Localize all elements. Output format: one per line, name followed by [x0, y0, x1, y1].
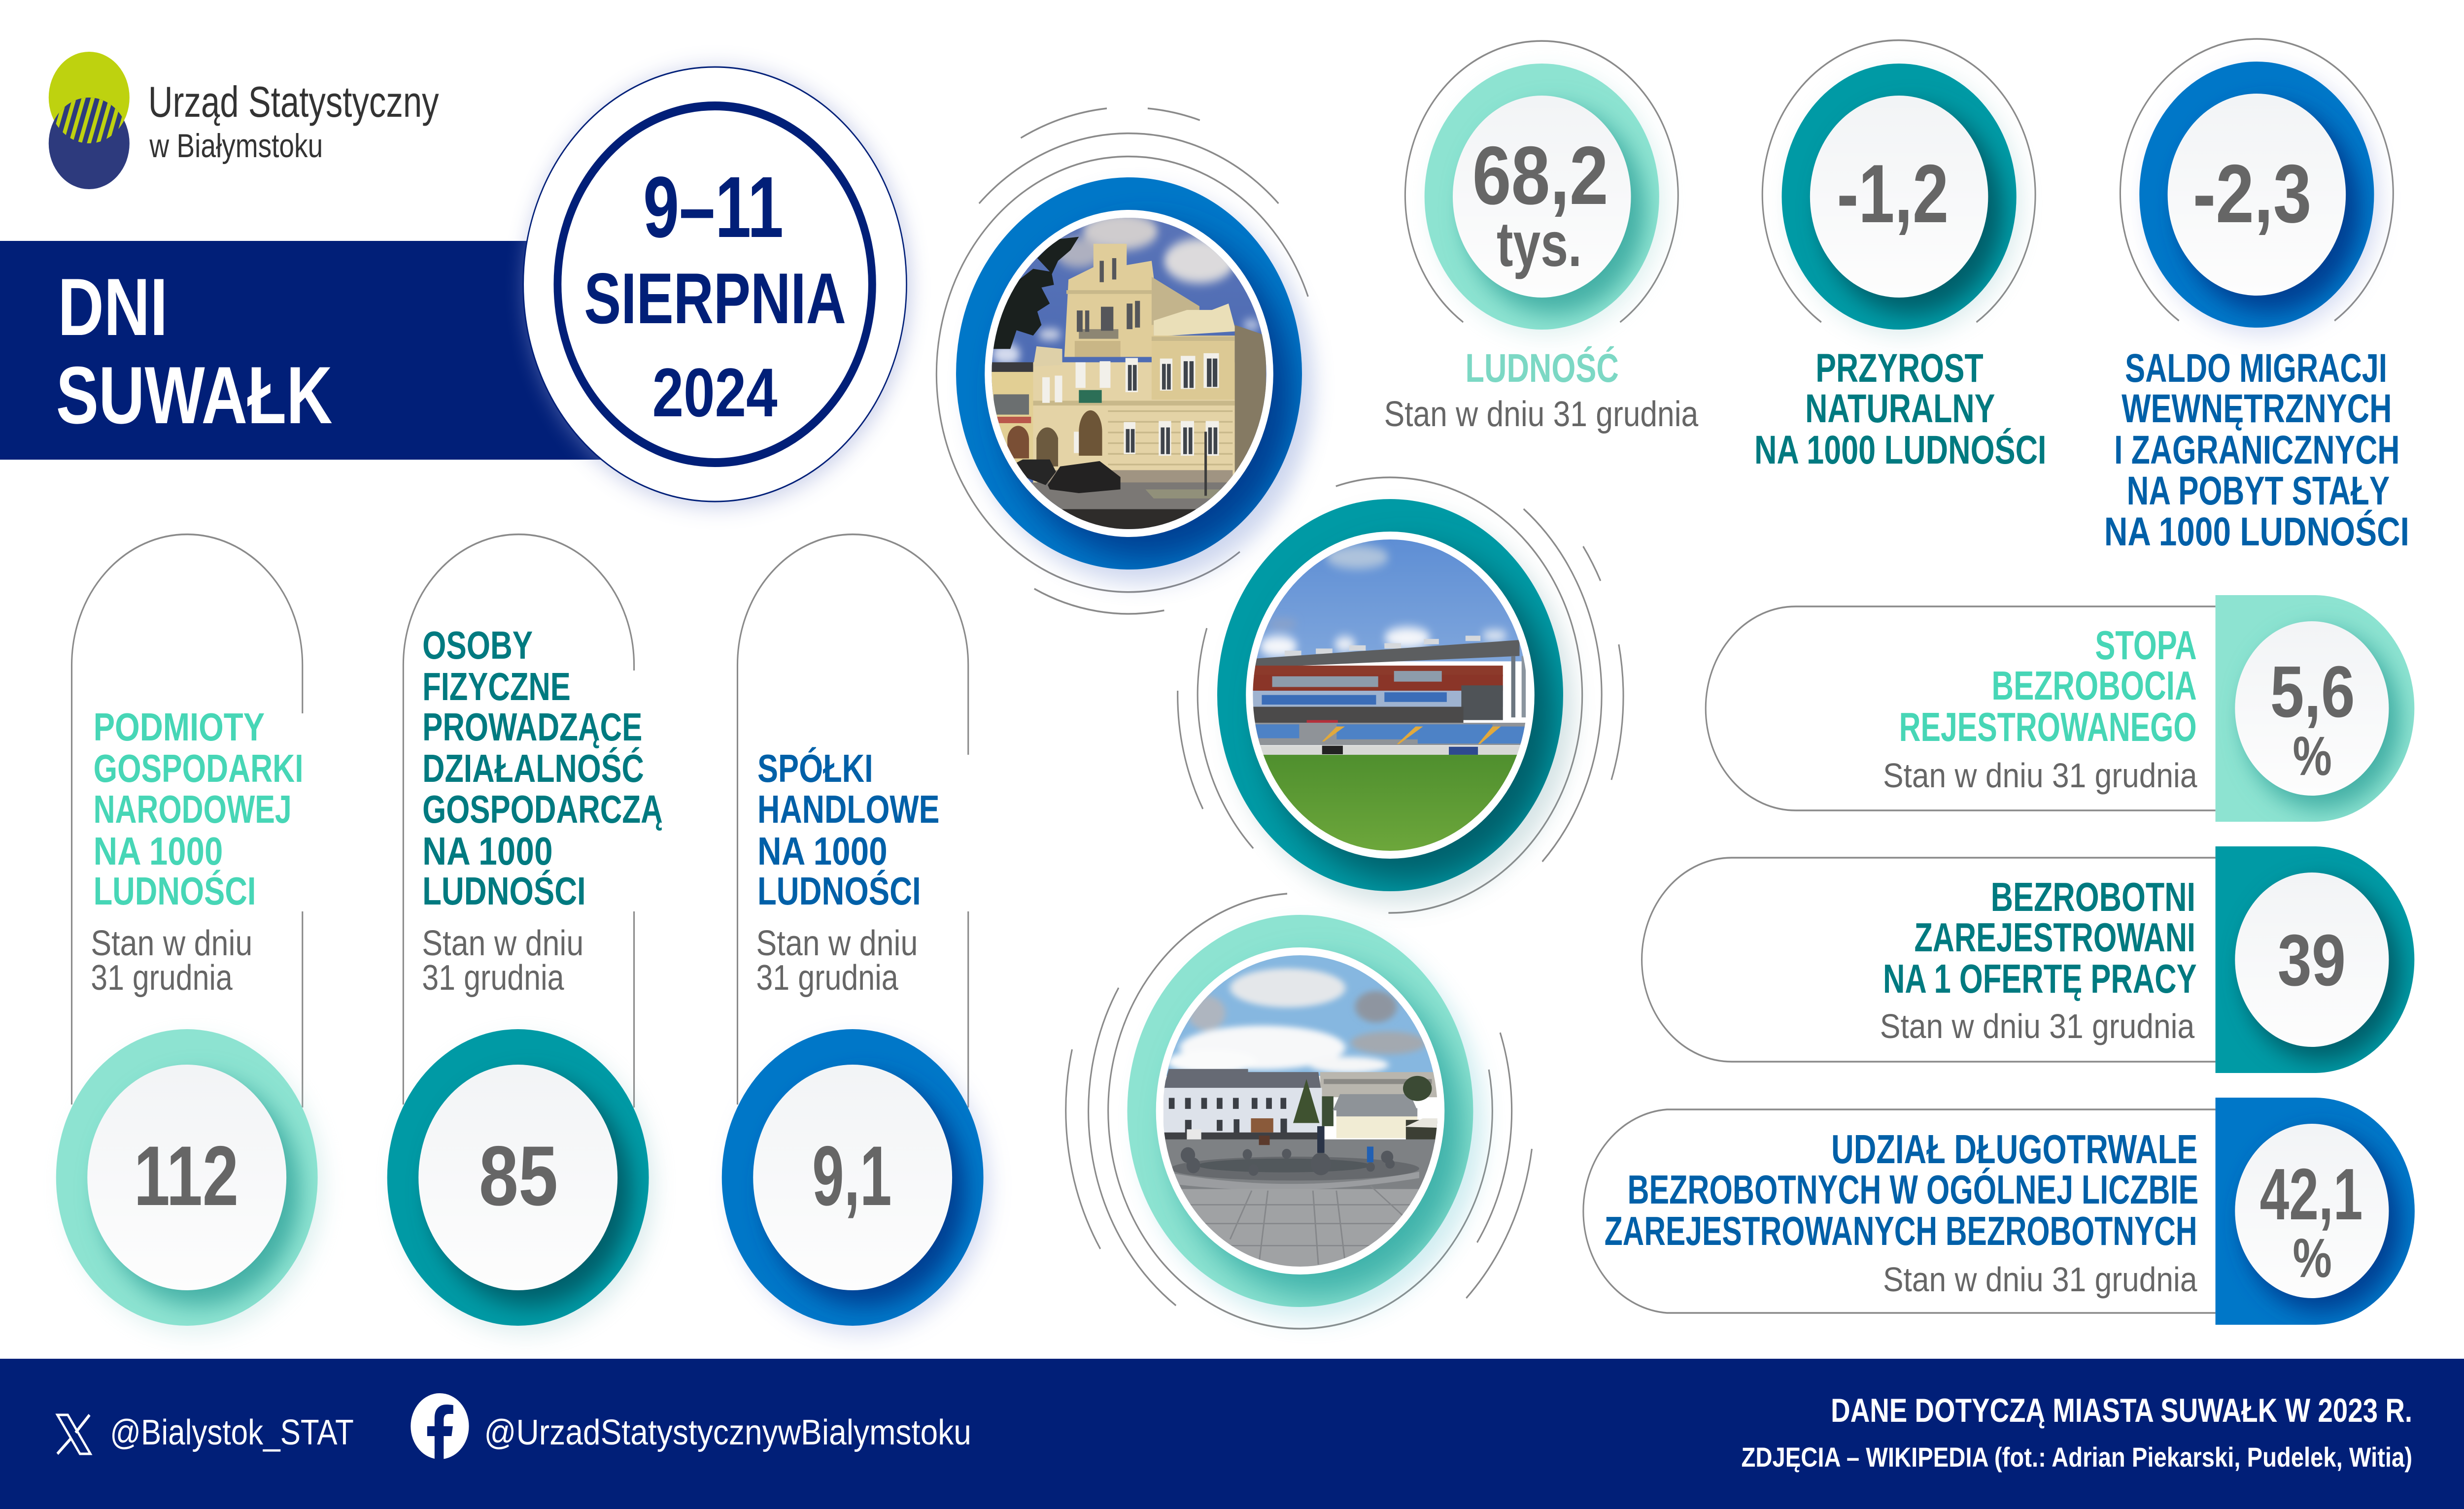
- value badge: 39: [2278, 919, 2346, 1001]
- heading: NA 1000: [757, 829, 888, 873]
- decorative arcs: [936, 108, 1308, 614]
- title band: [0, 241, 652, 460]
- heading: SPÓŁKI: [757, 746, 873, 790]
- text: NA 1 OFERTĘ PRACY: [1883, 956, 2197, 1002]
- heading: PODMIOTY: [94, 705, 265, 749]
- panel: unemployment rate: [1706, 595, 2414, 822]
- photo ring: [1127, 915, 1484, 1320]
- label: SALDO MIGRACJI: [2125, 346, 2387, 391]
- note: Stan w dniu: [422, 924, 583, 963]
- text: [1605, 1126, 2198, 1299]
- heading: OSOBY: [422, 623, 533, 667]
- note: Stan w dniu 31 grudnia: [1384, 395, 1698, 434]
- photo: stadium: [1253, 539, 1526, 851]
- logo name: w Białymstoku: [149, 127, 323, 165]
- source note: [1742, 1391, 2412, 1473]
- heading: LUDNOŚCI: [757, 869, 921, 913]
- note: Stan w dniu: [756, 924, 918, 963]
- text: [1880, 874, 2197, 1045]
- icon: Facebook: [411, 1393, 469, 1459]
- text: BEZROBOCIA: [1991, 663, 2197, 708]
- arch outline: [72, 535, 303, 1107]
- heading: PROWADZĄCE: [422, 705, 642, 749]
- note: 31 grudnia: [422, 958, 564, 998]
- value badge: %: [2293, 725, 2332, 787]
- stat: migration balance: [2104, 39, 2409, 554]
- outline: [1706, 606, 2216, 810]
- date text: SIERPNIA: [584, 258, 846, 339]
- panel: long-term unemployed share: [1583, 1098, 2415, 1325]
- label: NA 1000 LUDNOŚCI: [2104, 509, 2409, 554]
- value: -1,2: [1837, 147, 1949, 240]
- label: NA 1000 LUDNOŚCI: [1754, 428, 2047, 472]
- photo ring: [956, 177, 1314, 583]
- label: [2104, 346, 2409, 554]
- heading: FIZYCZNE: [422, 665, 571, 708]
- arc: [1405, 41, 1678, 322]
- text: BEZROBOTNYCH W OGÓLNEJ LICZBIE: [1627, 1167, 2198, 1212]
- note: [422, 924, 583, 998]
- text: Stan w dniu 31 grudnia: [1883, 756, 2197, 795]
- outline: [1642, 858, 2216, 1062]
- text: UDZIAŁ DŁUGOTRWALE: [1831, 1126, 2197, 1172]
- ring: [2139, 62, 2379, 334]
- value: -2,3: [2193, 147, 2311, 240]
- note: [91, 924, 252, 998]
- note: 31 grudnia: [91, 958, 233, 998]
- decorative arcs: [1066, 894, 1532, 1329]
- logo emblem: [49, 52, 130, 189]
- text: Stan w dniu 31 grudnia: [1883, 1260, 2197, 1299]
- panel: commercial companies: [722, 535, 990, 1333]
- value: [1472, 129, 1608, 280]
- heading: [757, 746, 940, 913]
- footer: [0, 1359, 2464, 1509]
- title: [56, 261, 333, 440]
- heading: [94, 705, 304, 913]
- label: NATURALNY: [1805, 386, 1995, 431]
- text: [1883, 622, 2197, 795]
- arc: [2120, 39, 2393, 321]
- title: SUWAŁK: [56, 349, 333, 440]
- ring: [56, 1029, 324, 1333]
- label: WEWNĘTRZNYCH: [2122, 386, 2392, 431]
- text: STOPA: [2095, 622, 2197, 668]
- ring: 9,1: [812, 1129, 892, 1223]
- stat: population: [1384, 41, 1698, 434]
- label: NA POBYT STAŁY: [2127, 469, 2390, 513]
- label: PRZYROST: [1815, 346, 1984, 391]
- stat: natural increase: [1754, 40, 2047, 472]
- ring: 85: [479, 1129, 558, 1223]
- icon: X: [57, 1415, 90, 1454]
- ring: 112: [134, 1129, 239, 1223]
- value badge: [2216, 595, 2414, 822]
- value badge: %: [2293, 1227, 2332, 1289]
- date text: 2024: [652, 354, 778, 431]
- heading: NA 1000: [422, 829, 553, 873]
- date text: [584, 159, 846, 431]
- note: 31 grudnia: [756, 958, 898, 998]
- arc: [1762, 40, 2035, 322]
- panel: photo stadium: [1178, 477, 1623, 913]
- title: DNI: [58, 261, 168, 352]
- photo: historic building: [992, 218, 1266, 529]
- heading: GOSPODARKI: [94, 746, 304, 790]
- date badge: [523, 67, 911, 507]
- ring: [1425, 64, 1664, 335]
- text: REJESTROWANEGO: [1899, 704, 2197, 750]
- text: ZAREJESTROWANYCH BEZROBOTNYCH: [1605, 1208, 2197, 1254]
- ring: [722, 1029, 990, 1333]
- ring: [387, 1029, 655, 1333]
- label: I ZAGRANICZNYCH: [2114, 428, 2399, 472]
- value badge: [2216, 1098, 2415, 1325]
- panel: unemployed per job offer: [1642, 846, 2414, 1073]
- heading: HANDLOWE: [757, 787, 940, 831]
- source note: ZDJĘCIA – WIKIPEDIA (fot.: Adrian Piekarski, Pudelek, Witia): [1742, 1442, 2412, 1473]
- logo name: Urząd Statystyczny: [148, 77, 439, 126]
- panel: photo town hall: [936, 108, 1314, 614]
- panel: national economy entities: [56, 535, 324, 1333]
- photo: square with fountain: [1153, 950, 1444, 1271]
- heading: LUDNOŚCI: [94, 869, 256, 913]
- note: Stan w dniu: [91, 924, 252, 963]
- outline: [1583, 1109, 2216, 1313]
- decorative arcs: [1178, 477, 1623, 913]
- text: Stan w dniu 31 grudnia: [1880, 1006, 2195, 1045]
- logo name: [148, 77, 439, 165]
- value badge: 42,1: [2260, 1153, 2363, 1235]
- label: [1754, 346, 2047, 472]
- arch outline: [737, 535, 968, 1107]
- logo: [49, 52, 439, 189]
- value badge: [2216, 846, 2414, 1073]
- date text: 9–11: [643, 159, 784, 256]
- photo ring: [1217, 499, 1574, 905]
- source note: DANE DOTYCZĄ MIASTA SUWAŁK W 2023 R.: [1831, 1391, 2412, 1429]
- heading: GOSPODARCZĄ: [422, 787, 663, 831]
- value: tys.: [1497, 209, 1582, 280]
- text: BEZROBOTNI: [1991, 874, 2195, 920]
- note: [756, 924, 918, 998]
- heading: NA 1000: [94, 829, 223, 873]
- heading: LUDNOŚCI: [422, 869, 586, 913]
- arch outline: [403, 535, 634, 1107]
- text: ZAREJESTROWANI: [1914, 914, 2195, 960]
- value badge: 5,6: [2270, 651, 2355, 733]
- heading: DZIAŁALNOŚĆ: [422, 746, 644, 790]
- panel: self-employed persons: [387, 535, 663, 1333]
- ring: [1782, 64, 2021, 335]
- value: 68,2: [1472, 129, 1608, 222]
- Facebook handle: @UrzadStatystycznywBialymstoku: [484, 1413, 971, 1452]
- heading: NARODOWEJ: [94, 787, 292, 831]
- heading: [422, 623, 663, 913]
- panel: photo market square: [1066, 894, 1532, 1329]
- X handle: @Bialystok_STAT: [110, 1413, 354, 1452]
- label: LUDNOŚĆ: [1466, 346, 1619, 391]
